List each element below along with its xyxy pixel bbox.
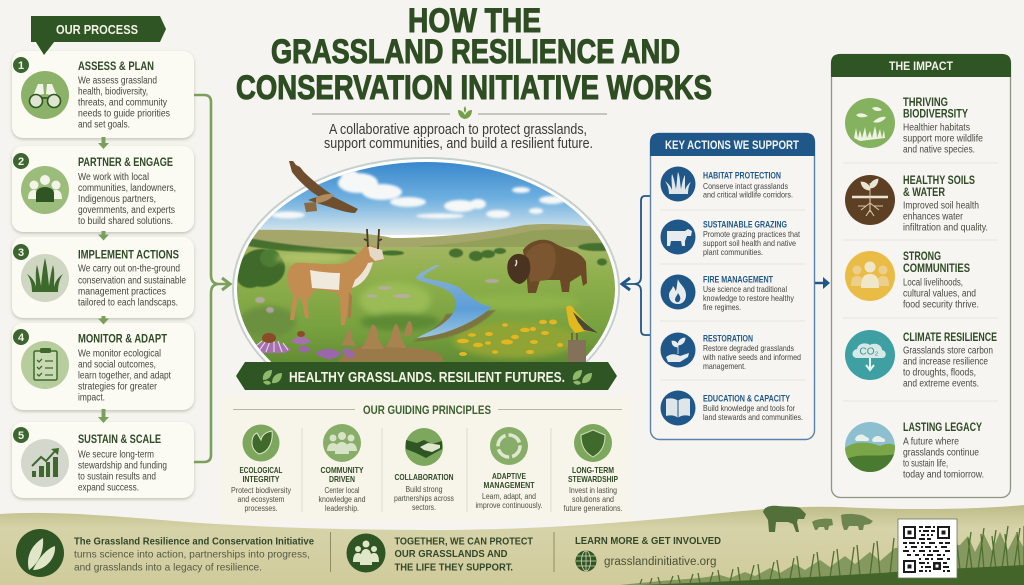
left bush	[236, 249, 285, 288]
icon: binoculars	[21, 71, 69, 119]
step 2 card: We work with local	[78, 172, 149, 183]
principle: adaptive management: improve continuously.	[476, 501, 542, 510]
step 2 card: to build shared solutions.	[78, 216, 173, 227]
principle: adaptive management: ADAPTIVE	[492, 471, 526, 481]
principle: community driven	[318, 424, 366, 513]
step 5 card: SUSTAIN & SCALE	[78, 434, 161, 446]
panel: key actions: KEY ACTIONS WE SUPPORT	[665, 138, 800, 152]
impact: thriving biodiversity: BIODIVERSITY	[903, 108, 968, 120]
step arrows	[98, 137, 109, 423]
step 2 card: communities, landowners,	[78, 183, 176, 194]
footer: call to action: THE LIFE THEY SUPPORT.	[394, 562, 513, 574]
step 1 card: health, biodiversity,	[78, 86, 148, 98]
step 3 card: IMPLEMENT ACTIONS	[78, 250, 179, 262]
action: habitat protection	[660, 166, 793, 202]
impact: thriving biodiversity	[845, 97, 983, 156]
meadow	[230, 247, 625, 367]
footer: learn more: LEARN MORE & GET INVOLVED	[575, 535, 721, 547]
step 3 card: management practices	[78, 286, 166, 298]
icon: globe	[576, 550, 596, 572]
principle: ecological integrity: ECOLOGICAL	[240, 465, 282, 475]
panel: the impact: THE IMPACT	[889, 59, 954, 73]
title divider with sprout	[312, 106, 607, 119]
post and meadowlark	[566, 306, 598, 362]
footer: call to action: TOGETHER, WE CAN PROTECT	[394, 536, 533, 548]
footer: initiative statement: The Grassland Resilience and Conservation Initiative	[74, 536, 314, 548]
step 1 card: ASSESS & PLAN	[78, 61, 154, 73]
action: education and capacity	[660, 390, 803, 426]
principle: collaboration: partnerships across	[394, 494, 454, 503]
impact: strong communities: Local livelihoods,	[903, 278, 963, 288]
action: fire management: fire regimes.	[703, 302, 741, 312]
action: fire management: FIRE MANAGEMENT	[703, 274, 773, 286]
impact: climate resilience: Grasslands store carbon	[903, 346, 993, 356]
impact: thriving biodiversity: Healthier habitats	[903, 122, 970, 134]
principle: long-term stewardship: solutions and	[572, 495, 614, 504]
step 1 card: We assess grassland	[78, 76, 157, 86]
cow	[763, 506, 806, 532]
impact: strong communities: STRONG	[903, 251, 941, 263]
banner: our process	[31, 16, 166, 55]
action: sustainable grazing: SUSTAINABLE GRAZING	[703, 220, 787, 230]
step 1 card	[12, 42, 194, 138]
step 4 card: We monitor ecological	[78, 348, 161, 360]
principle: long-term stewardship: Invest in lasting	[569, 486, 617, 495]
grass foreground	[620, 526, 1024, 585]
principle: ecological integrity: Protect biodiversity	[231, 486, 291, 495]
clouds	[271, 170, 565, 218]
principle: long-term stewardship: LONG-TERM	[572, 465, 614, 475]
impact: healthy soils and water: HEALTHY SOILS	[903, 175, 975, 187]
title: GRASSLAND RESILIENCE AND	[271, 33, 680, 71]
step 2 card: governments, and experts	[78, 205, 175, 216]
step 5 card: stewardship and funding	[78, 460, 167, 472]
principle: long-term stewardship: future generations.	[564, 504, 622, 513]
step 4 card: 4	[18, 332, 25, 344]
purple coneflowers	[250, 331, 356, 360]
action: restoration: RESTORATION	[703, 334, 753, 344]
action: sustainable grazing: support soil health and native	[703, 238, 796, 248]
impact: lasting legacy: LASTING LEGACY	[903, 422, 982, 434]
action: restoration: with native seeds and informed	[702, 352, 801, 362]
step 2 card: Indigenous partners,	[78, 194, 156, 205]
action: sustainable grazing: plant communities.	[703, 247, 763, 257]
step 3 card: conservation and sustainable	[78, 276, 186, 286]
footer: learn more	[575, 535, 721, 572]
hawk	[289, 161, 358, 213]
impact: strong communities	[845, 251, 979, 310]
impact: strong communities: food security thrive.	[903, 300, 979, 310]
principle: ecological integrity: processes.	[244, 504, 278, 513]
impact: strong communities: cultural values, and	[903, 288, 976, 300]
pronghorn	[287, 229, 384, 325]
distant tree line	[244, 238, 618, 266]
footer: call to action: OUR GRASSLANDS AND	[394, 548, 508, 560]
step 1 card: threats, and community	[78, 98, 167, 108]
principle: community driven: Center local	[324, 486, 360, 495]
sky	[256, 162, 594, 235]
banner: our process: OUR PROCESS	[56, 23, 138, 37]
principle: adaptive management	[476, 427, 542, 510]
footer: initiative statement: and grasslands into a legacy of resilience.	[74, 562, 262, 574]
impact: climate resilience: CO₂	[860, 346, 879, 358]
impact: lasting legacy: A future where	[903, 436, 959, 448]
principle: collaboration: sectors.	[412, 503, 436, 512]
title	[236, 2, 712, 107]
QR code	[898, 519, 957, 578]
action: sustainable grazing	[660, 220, 801, 257]
connector: key actions to landscape	[622, 196, 650, 335]
step 4 card: impact.	[78, 392, 105, 404]
step 4 card: strategies for greater	[78, 382, 158, 392]
landscape illustration	[232, 157, 620, 390]
impact: thriving biodiversity: and native species.	[903, 144, 975, 156]
principle: collaboration: COLLABORATION	[394, 472, 454, 482]
step 3 card	[12, 237, 194, 318]
principle: ecological integrity	[231, 424, 291, 513]
principle: community driven: DRIVEN	[329, 474, 355, 484]
principle: adaptive management: MANAGEMENT	[484, 480, 535, 490]
icon: clipboard	[21, 341, 69, 389]
impact: climate resilience: CLIMATE RESILIENCE	[903, 332, 997, 344]
step 5 card: 5	[18, 430, 24, 442]
principle: community driven: COMMUNITY	[320, 465, 364, 475]
panel: our process	[12, 16, 230, 498]
step 2 card: PARTNER & ENGAGE	[78, 157, 173, 169]
step 4 card: and social outcomes,	[78, 360, 156, 370]
step 5 card: to sustain results and	[78, 472, 156, 482]
connector: process to landscape	[194, 95, 230, 462]
step 4 card: MONITOR & ADAPT	[78, 334, 167, 346]
icon: growth chart	[21, 439, 69, 487]
impact: lasting legacy: today and tomiorrow.	[903, 470, 984, 480]
step 4 card: learn together, and adapt	[78, 370, 171, 382]
impact: climate resilience: to droughts, floods,	[903, 368, 976, 378]
principle: collaboration: Build strong	[406, 485, 442, 494]
oval frame	[232, 157, 620, 362]
subtitle	[324, 122, 593, 152]
bison	[507, 240, 587, 293]
footer band	[0, 505, 1024, 585]
distant hills	[240, 224, 625, 256]
footer: call to action	[346, 534, 533, 574]
action: education and capacity: EDUCATION & CAPACITY	[703, 394, 790, 404]
step 4 card	[12, 323, 194, 410]
sheep	[841, 514, 873, 530]
action: restoration: management.	[703, 361, 746, 371]
impact: strong communities: COMMUNITIES	[903, 263, 970, 275]
step 2 card	[12, 146, 194, 232]
action: restoration	[660, 332, 801, 371]
impact: healthy soils and water: & WATER	[903, 187, 946, 199]
calf	[812, 519, 833, 530]
action: habitat protection: and critical wildlife corridors.	[703, 190, 793, 200]
principle: community driven: knowledge and	[318, 495, 366, 504]
icon: grass	[21, 254, 69, 302]
panel: guiding principles: OUR GUIDING PRINCIPLES	[363, 403, 491, 417]
impact: lasting legacy	[845, 422, 984, 480]
step 3 card: We carry out on-the-ground	[78, 264, 180, 274]
action: fire management: knowledge to restore healthy	[703, 293, 795, 303]
prairie dog mounds and soil	[338, 321, 444, 362]
title: HOW THE	[408, 2, 541, 40]
action: education and capacity: Build knowledge and tools for	[703, 403, 795, 413]
icon: community	[346, 534, 386, 572]
step 5 card	[12, 422, 194, 498]
action: sustainable grazing: Promote grazing practices that	[703, 229, 801, 239]
impact: healthy soils and water: Improved soil health	[903, 200, 979, 212]
icon: leaf	[16, 529, 64, 577]
grazing animals	[763, 506, 873, 532]
step 5 card: We secure long-term	[78, 450, 154, 460]
principle: long-term stewardship	[564, 424, 622, 513]
action: education and capacity: land stewards and communities.	[703, 412, 803, 422]
footer: initiative statement	[16, 529, 314, 577]
principle: collaboration	[394, 428, 454, 512]
arrow: key actions to impact	[815, 277, 830, 289]
subtitle: support communities, and build a resilient future.	[324, 136, 593, 152]
footer: initiative statement: turns science into action, partnerships into progress,	[74, 548, 310, 560]
river	[412, 265, 496, 342]
banner: healthy grasslands: HEALTHY GRASSLANDS. RESILIENT FUTURES.	[289, 370, 565, 386]
impact: thriving biodiversity: THRIVING	[903, 97, 948, 109]
footer: learn more: grasslandinitiative.org	[604, 556, 716, 568]
step 1 card: 1	[18, 60, 24, 72]
wildflower haze	[255, 279, 499, 313]
panel: the impact	[831, 54, 1011, 498]
step 2 card: 2	[18, 156, 24, 168]
action: fire management: Use science and traditional	[703, 284, 787, 294]
action: habitat protection: HABITAT PROTECTION	[703, 170, 781, 182]
title: CONSERVATION INITIATIVE WORKS	[236, 69, 712, 107]
impact: thriving biodiversity: support more wildlife	[903, 134, 983, 144]
principle: long-term stewardship: STEWARDSHIP	[568, 474, 618, 484]
principle: adaptive management: Learn, adapt, and	[482, 492, 536, 501]
banner: healthy grasslands	[236, 362, 617, 390]
impact: healthy soils and water: infiltration and quality.	[903, 222, 988, 234]
impact: lasting legacy: grasslands continue	[903, 448, 979, 458]
impact: lasting legacy: to sustain life,	[903, 458, 948, 470]
subtitle: A collaborative approach to protect grasslands,	[329, 122, 587, 138]
step 1 card: and set goals.	[78, 120, 130, 130]
step 3 card: 3	[18, 247, 24, 259]
principle: community driven: leadership.	[325, 504, 359, 513]
icon: people	[21, 166, 69, 214]
yellow wildflowers	[457, 320, 563, 356]
impact: climate resilience: and increase resilience	[903, 356, 988, 368]
impact: healthy soils and water: enhances water	[903, 212, 964, 222]
panel: key actions	[650, 133, 815, 440]
impact: healthy soils and water	[845, 175, 988, 234]
principle: ecological integrity: INTEGRITY	[242, 474, 280, 484]
impact: climate resilience	[845, 330, 997, 390]
panel: guiding principles	[222, 397, 632, 521]
step 1 card: needs to guide priorities	[78, 108, 170, 120]
step 5 card: expand success.	[78, 482, 139, 494]
action: fire management	[660, 274, 795, 312]
impact: climate resilience: and extreme events.	[903, 378, 979, 390]
meadow light patches	[240, 253, 580, 358]
action: restoration: Restore degraded grasslands	[703, 343, 794, 353]
step 3 card: tailored to each landscaps.	[78, 298, 178, 308]
action: habitat protection: Conserve intact grasslands	[703, 181, 788, 191]
principle: ecological integrity: and ecosystem	[238, 495, 284, 504]
